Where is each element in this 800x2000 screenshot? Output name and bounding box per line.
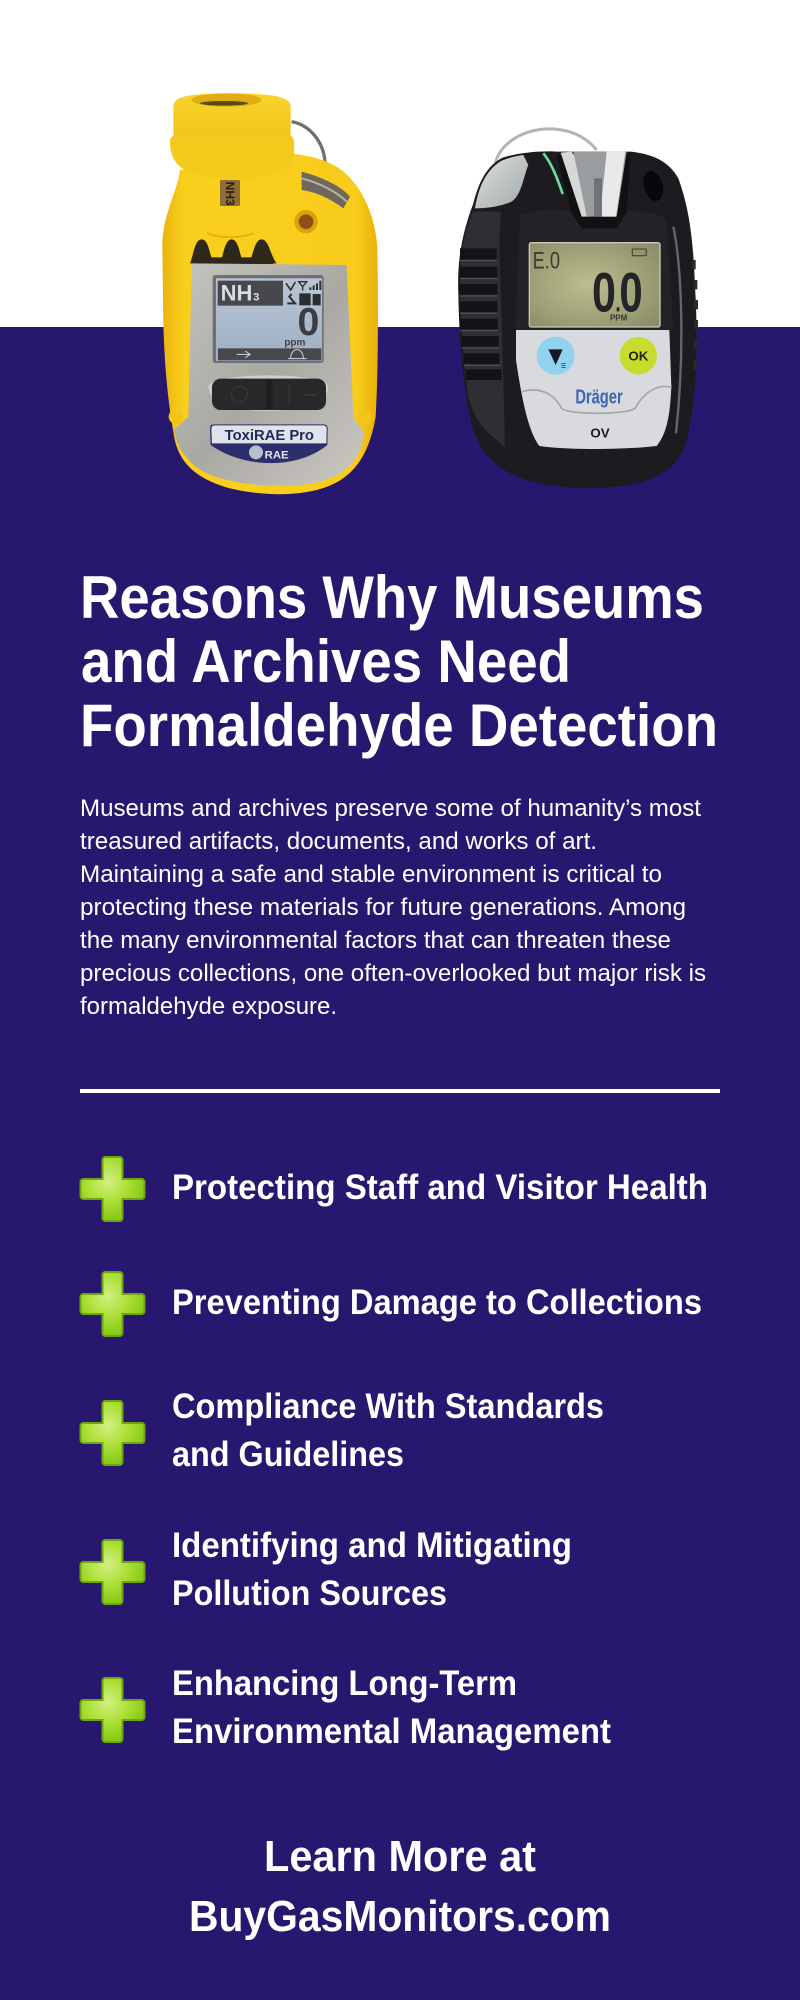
- item heading: Protecting Staff and Visitor Health: [172, 1168, 708, 1207]
- icon: yellow ToxiRAE Pro gas monitor: NH3: [223, 182, 237, 206]
- list item 1: Protecting Staff and Visitor Health: [80, 1157, 708, 1221]
- call to action footer: BuyGasMonitors.com: [189, 1892, 611, 1941]
- intro paragraph: treasured artifacts, documents, and works of art.: [80, 828, 597, 855]
- intro paragraph: the many environmental factors that can threaten these: [80, 927, 671, 954]
- item heading: and Guidelines: [172, 1435, 404, 1474]
- item heading: [172, 1526, 572, 1613]
- title: and Archives Need: [81, 628, 571, 695]
- title: Formaldehyde Detection: [80, 692, 718, 759]
- icon: black Dräger Pac gas monitor: PPM: [610, 314, 628, 323]
- intro paragraph: formaldehyde exposure.: [80, 993, 337, 1020]
- white top background: [0, 0, 800, 327]
- icon: black Dräger Pac gas monitor: 0: [619, 260, 643, 323]
- intro paragraph: [80, 795, 706, 1020]
- icon: green plus: [80, 1678, 144, 1742]
- title: [80, 564, 718, 759]
- item heading: Pollution Sources: [172, 1574, 447, 1613]
- icon: green plus: [80, 1272, 144, 1336]
- intro paragraph: precious collections, one often-overlooked but major risk is: [80, 960, 706, 987]
- icon: yellow ToxiRAE Pro gas monitor: 0: [297, 300, 319, 344]
- intro paragraph: Maintaining a safe and stable environment is critical to: [80, 861, 662, 888]
- icon: green plus: [80, 1157, 144, 1221]
- icon: yellow ToxiRAE Pro gas monitor: [162, 93, 378, 494]
- icon: yellow ToxiRAE Pro gas monitor: ppm: [284, 337, 306, 348]
- call to action footer: [189, 1832, 611, 1941]
- call to action footer: Learn More at: [264, 1832, 536, 1881]
- icon: black Dräger Pac gas monitor: Dräger: [575, 385, 623, 408]
- list item 2: Preventing Damage to Collections: [80, 1272, 702, 1336]
- item heading: [172, 1387, 604, 1474]
- intro paragraph: Museums and archives preserve some of humanity’s most: [80, 795, 701, 822]
- item heading: [172, 1664, 611, 1751]
- item heading: Identifying and Mitigating: [172, 1526, 572, 1565]
- list item 5: Enhancing Long-Term Environmental Management: [80, 1664, 611, 1751]
- list item 4: Identifying and Mitigating Pollution Sources: [80, 1526, 572, 1613]
- icon: black Dräger Pac gas monitor: OV: [590, 425, 610, 440]
- item heading: Enhancing Long-Term: [172, 1664, 517, 1703]
- icon: yellow ToxiRAE Pro gas monitor: RAE: [265, 449, 289, 461]
- icon: green plus: [80, 1540, 144, 1604]
- title: Reasons Why Museums: [80, 564, 704, 631]
- item heading: Environmental Management: [172, 1712, 611, 1751]
- icon: black Dräger Pac gas monitor: OK: [628, 349, 649, 364]
- icon: green plus: [80, 1401, 144, 1465]
- list item 3: Compliance With Standards and Guidelines: [80, 1387, 604, 1474]
- item heading: Preventing Damage to Collections: [172, 1283, 702, 1322]
- icon: black Dräger Pac gas monitor: [458, 129, 698, 488]
- intro paragraph: protecting these materials for future generations. Among: [80, 894, 686, 921]
- item heading: Compliance With Standards: [172, 1387, 604, 1426]
- icon: yellow ToxiRAE Pro gas monitor: ToxiRAE Pro: [225, 427, 314, 444]
- icon: yellow ToxiRAE Pro gas monitor: NH3: [221, 281, 259, 306]
- icon: black Dräger Pac gas monitor: 0: [592, 260, 616, 323]
- icon: black Dräger Pac gas monitor: E.0: [533, 247, 560, 274]
